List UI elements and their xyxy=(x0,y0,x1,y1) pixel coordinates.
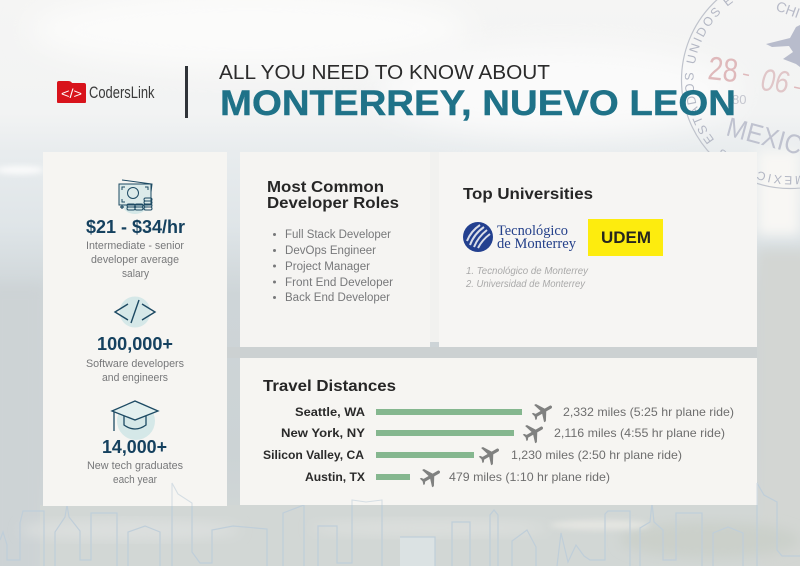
list: roles: DevOps Engineer xyxy=(285,245,376,257)
stat: graduates: 14,000+ xyxy=(102,437,167,457)
stat: graduates xyxy=(87,437,183,486)
city skyline outline xyxy=(0,483,800,566)
list: universities xyxy=(465,266,589,290)
stat: developers: 100,000+ xyxy=(97,334,173,354)
heading: roles xyxy=(267,179,399,212)
stat: salary: $21 - $34/hr xyxy=(86,217,185,237)
list: roles: Project Manager xyxy=(285,261,370,273)
list: roles xyxy=(273,229,393,304)
stat: salary: Intermediate - senior xyxy=(86,240,184,252)
stat: developers: Software developers xyxy=(86,358,184,370)
list: roles: Front End Developer xyxy=(285,277,393,289)
skyline overlap above panels xyxy=(172,483,757,506)
passport stamp xyxy=(680,0,800,190)
row: Austin: Austin, TX xyxy=(305,470,365,484)
heading: roles: Developer Roles xyxy=(267,195,399,212)
row: New York: New York, NY xyxy=(281,426,365,440)
row: Silicon Valley: Silicon Valley, CA xyxy=(263,448,364,462)
stat: graduates: each year xyxy=(113,474,157,486)
list: roles: Back End Developer xyxy=(285,292,390,304)
icon: money and coins xyxy=(119,180,152,214)
row: New York: 2,116 miles (4:55 hr plane ride) xyxy=(554,426,725,440)
panel: travel distances xyxy=(240,358,757,505)
panel: top universities xyxy=(439,152,757,347)
stat: salary: salary xyxy=(122,268,149,280)
logo: Tecnologico de Monterrey xyxy=(463,222,577,252)
stat: developers: and engineers xyxy=(102,372,168,384)
panel: key stats xyxy=(43,152,227,506)
icon: stamp plane xyxy=(766,25,800,67)
logo: Tecnologico de Monterrey: Tecnológico xyxy=(497,223,568,239)
panel: developer roles xyxy=(240,152,430,347)
logo: CodersLink xyxy=(57,81,155,103)
title xyxy=(219,62,736,123)
heading: roles: Most Common xyxy=(267,179,384,196)
list: roles: Full Stack Developer xyxy=(285,229,391,241)
list: universities: 1. Tecnológico de Monterrey xyxy=(466,266,589,277)
row: Seattle: Seattle, WA xyxy=(295,405,365,419)
heading: travel distances: Travel Distances xyxy=(263,378,396,395)
passport stamp: 28 xyxy=(706,49,740,89)
row: Austin: 479 miles (1:10 hr plane ride) xyxy=(449,470,610,484)
passport stamp: 06 xyxy=(759,62,791,100)
logo: UDEM xyxy=(588,219,663,256)
stat: graduates: New tech graduates xyxy=(87,460,183,472)
icon: graduation cap xyxy=(112,401,158,440)
header divider xyxy=(185,66,188,118)
icon: code brackets xyxy=(115,296,155,328)
row: Silicon Valley xyxy=(263,441,682,468)
logo wordmark: CodersLink xyxy=(89,84,155,102)
row: Silicon Valley: 1,230 miles (2:50 hr plane ride) xyxy=(511,448,682,462)
title: MONTERREY, NUEVO LEON xyxy=(220,83,736,123)
stat: salary: developer average xyxy=(91,254,179,266)
stat: developers xyxy=(86,334,184,384)
logo: Tecnologico de Monterrey: de Monterrey xyxy=(497,236,577,252)
stat: salary xyxy=(86,217,185,280)
icon: red folder: </> xyxy=(61,86,82,101)
list: universities: 2. Universidad de Monterrey xyxy=(465,279,586,290)
row: New York xyxy=(281,419,725,446)
row: Austin xyxy=(305,463,610,490)
row: Seattle: 2,332 miles (5:25 hr plane ride) xyxy=(563,405,734,419)
row: Seattle xyxy=(295,398,734,425)
heading: universities: Top Universities xyxy=(463,186,593,203)
logo: UDEM: UDEM xyxy=(601,228,651,247)
title: ALL YOU NEED TO KNOW ABOUT xyxy=(219,62,550,84)
passport stamp: 80 xyxy=(732,92,746,107)
